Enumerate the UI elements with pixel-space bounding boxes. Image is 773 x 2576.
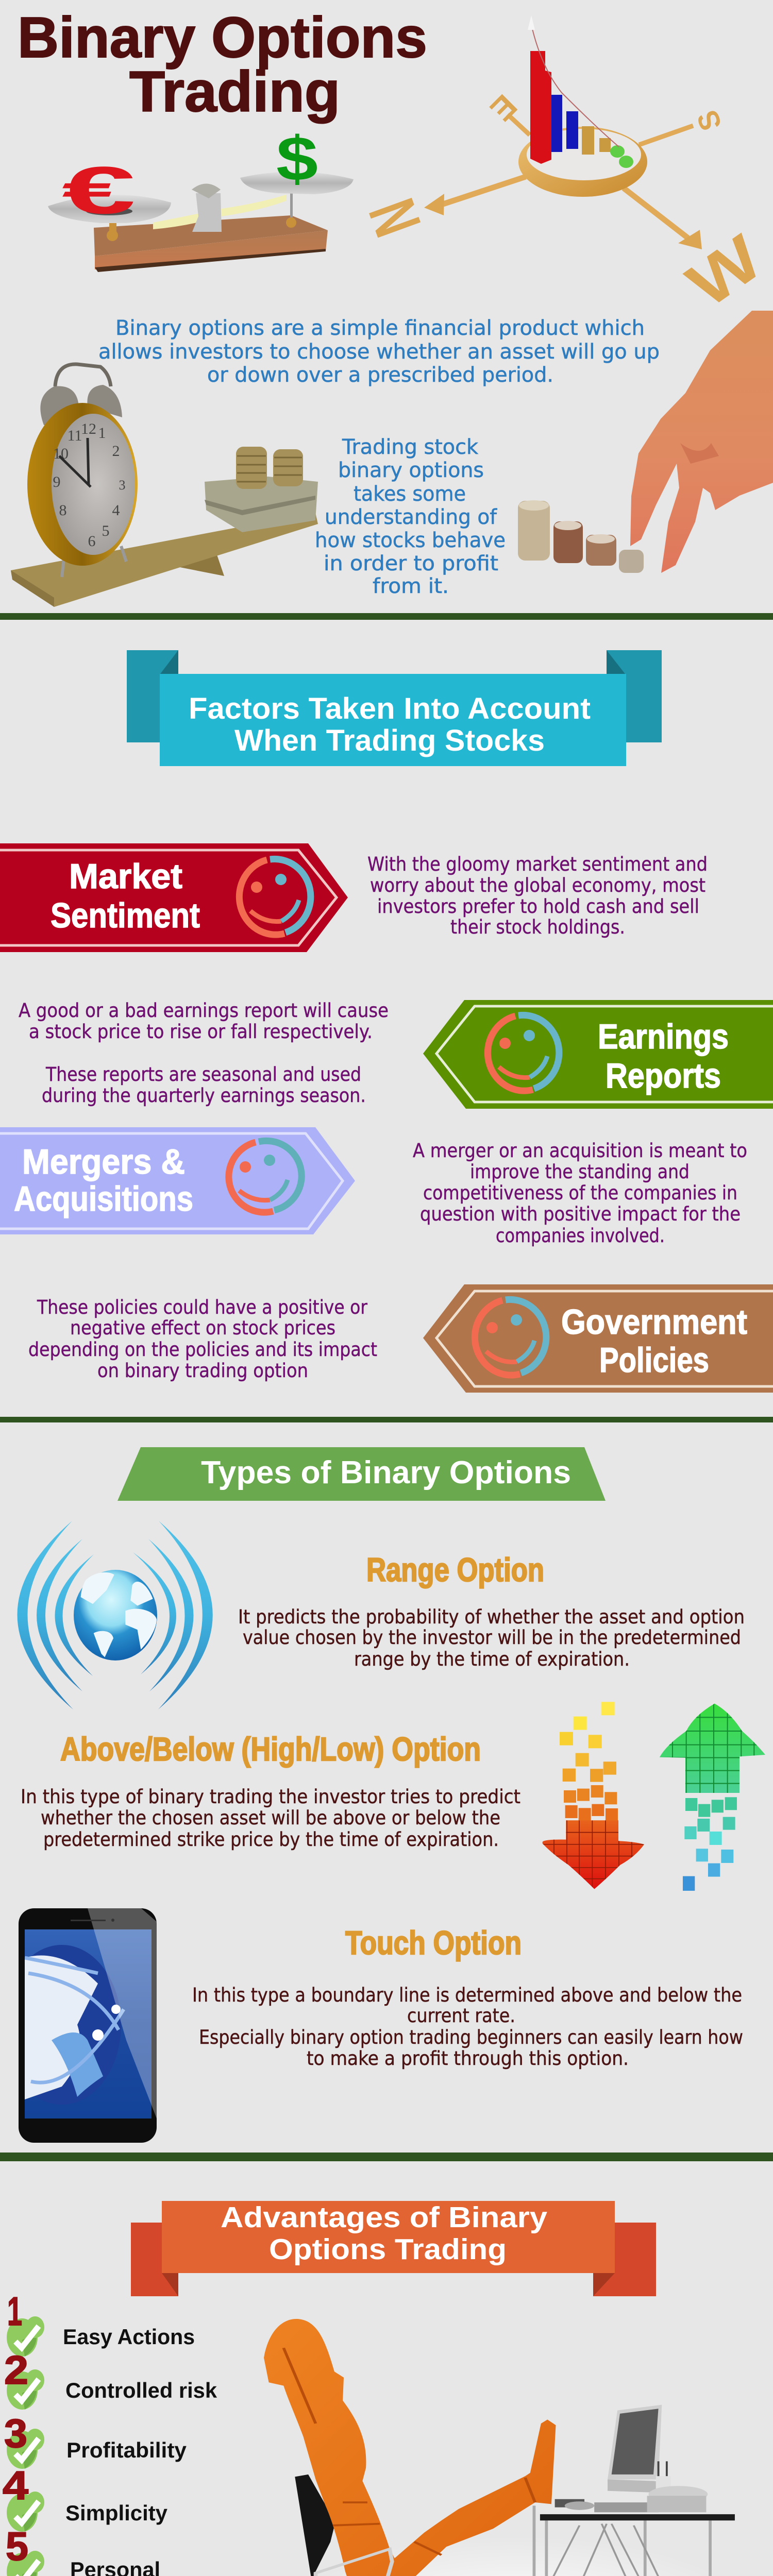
icon: compass with bar chart: W [675,222,773,321]
heading ribbon: advantages: Advantages of Binary [221,2201,547,2234]
text block: market sentiment: their stock holdings. [450,916,625,938]
text block: earnings reports: during the quarterly earnings season. [42,1084,366,1107]
text block: government policies [28,1296,377,1382]
text block: intro [98,316,660,387]
text block: above below option: predetermined strike price by the time of expiration. [43,1828,499,1851]
panel: earnings reports: Earnings [598,1017,729,1056]
icon: smartphone [19,1908,157,2143]
list item 2: Controlled risk [65,2378,217,2402]
text block: government policies: on binary trading option [97,1360,308,1382]
icon: balance scale with euro and dollar [48,124,354,272]
icon: compass with bar chart: S [691,106,728,135]
panel: market sentiment: Market [69,857,182,896]
text block: trading stock: from it. [373,574,449,598]
text block: touch option: current rate. [407,2005,515,2027]
icon: compass with bar chart: N [355,190,434,245]
text block: earnings reports: A good or a bad earnings report will cause [19,999,389,1022]
text block: mergers [413,1140,747,1247]
text block: touch option: Touch Option [345,1924,522,1961]
icon: compass with bar chart [355,15,773,321]
panel: government policies: Government [561,1302,747,1342]
text block: intro: or down over a prescribed period. [207,363,553,387]
title: Trading [129,60,340,124]
text block: range option: range by the time of expiration. [354,1648,630,1670]
panel: earnings reports [423,1000,773,1109]
text block: trading stock: in order to profit [324,552,498,575]
text block: above below option [21,1731,520,1851]
checklist of advantages [3,2289,217,2576]
list item 1 [7,2289,195,2357]
icon: smiley [229,1141,301,1212]
heading ribbon: factors: When Trading Stocks [234,724,545,757]
text block: earnings reports: a stock price to rise or fall respectively. [29,1021,373,1043]
icon: alarm clock on plank with money: 2 [112,443,120,460]
title [18,6,427,124]
text block: trading stock: Trading stock [342,435,479,459]
text block: trading stock: how stocks behave [315,529,506,552]
list item 5: 5 [6,2523,28,2569]
icon: alarm clock on plank with money: 6 [88,533,96,550]
computer monitor [608,2405,708,2512]
mannequin figure [264,2319,556,2576]
list item 5 [6,2523,160,2576]
text block: intro: allows investors to choose whether an asset will go up [98,340,660,364]
text block: above below option: In this type of binary trading the investor tries to predict [21,1786,520,1808]
text block: mergers: question with positive impact for the [420,1203,741,1225]
icon: alarm clock on plank with money: 12 [81,420,96,437]
text block: market sentiment: worry about the global economy, most [370,874,705,896]
icon: alarm clock on plank with money: 8 [59,502,67,519]
text block: trading stock [315,435,506,598]
text block: trading stock: binary options [338,459,484,482]
panel: mergers and acquisitions: Mergers & [22,1142,185,1181]
text block: mergers: companies involved. [496,1225,665,1247]
heading ribbon: factors: Factors Taken Into Account [189,692,591,725]
text block: above below option: Above/Below (High/Low) Option [60,1731,481,1768]
icon: alarm clock on plank with money: 9 [53,473,61,490]
panel: market sentiment [0,843,348,952]
list item 1: Easy Actions [63,2325,195,2349]
text block: government policies: These policies could have a positive or [37,1296,368,1318]
text block: touch option: to make a profit through this option. [307,2047,629,2070]
icon: alarm clock on plank with money: 1 [98,425,106,442]
icon: compass with bar chart: E [483,88,524,128]
icon: smiley [475,1299,546,1375]
text block: mergers: competitiveness of the companies in [423,1182,737,1204]
list item 1: 1 [7,2289,22,2334]
text block: market sentiment: With the gloomy market sentiment and [367,853,708,875]
list item 4: Simplicity [65,2501,168,2525]
chair arm [315,2549,392,2576]
text block: earnings reports: These reports are seasonal and used [45,1063,361,1086]
text block: market sentiment: investors prefer to hold cash and sell [377,895,699,918]
heading ribbon: advantages [131,2201,656,2296]
heading ribbon: factors [127,650,662,766]
list item 2: 2 [4,2347,28,2393]
title: Binary Options [18,6,427,70]
desk [534,2499,735,2576]
icon: alarm clock on plank with money: 10 [53,445,69,462]
text block: mergers: A merger or an acquisition is meant to [413,1140,747,1162]
text block: trading stock: takes some [354,482,466,506]
panel: government policies [423,1284,773,1393]
icon: smiley [239,859,311,935]
panel: government policies: Policies [599,1341,709,1380]
text block: intro: Binary options are a simple financial product which [115,316,645,340]
chair [295,2475,430,2576]
heading: types of binary options [117,1447,606,1501]
text block: market sentiment [367,853,708,938]
text block: government policies: negative effect on stock prices [70,1317,335,1339]
list item 4 [3,2463,168,2532]
list item 3: Profitability [66,2438,187,2462]
text block: range option: Range Option [366,1551,544,1588]
list item 2 [4,2347,217,2410]
panel: earnings reports: Reports [606,1056,721,1095]
icon: down arrow [541,1702,646,1889]
text block: earnings reports [19,999,389,1107]
icon: hand walking on coins [518,311,773,573]
text block: trading stock: understanding of [325,505,497,529]
icon: smiley [488,1015,559,1091]
text block: touch option [192,1924,743,2070]
panel: market sentiment: Sentiment [51,896,200,935]
icon: globe with signal waves [17,1521,213,1709]
heading: types of binary options: Types of Binary Options [201,1455,571,1490]
illustration: mannequin relaxing at desk [264,2319,742,2576]
text block: mergers: improve the standing and [470,1161,690,1183]
icon: balance scale with euro and dollar: € [62,152,136,228]
list item 3 [4,2411,187,2469]
panel: mergers and acquisitions: Acquisitions [14,1179,193,1218]
heading ribbon: advantages: Options Trading [269,2233,507,2266]
icon: down and up cube arrows [541,1702,766,1891]
panel: mergers and acquisitions [0,1127,355,1234]
icon: alarm clock on plank with money: 4 [112,502,120,519]
icon: alarm clock on plank with money: 11 [68,427,82,444]
icon: alarm clock on plank with money: 5 [102,522,109,539]
icon: alarm clock on plank with money [11,364,318,607]
text block: above below option: whether the chosen asset will be above or below the [41,1807,500,1829]
icon: alarm clock on plank with money: 3 [119,478,126,493]
list item 4: 4 [3,2463,28,2508]
list item 3: 3 [4,2411,27,2456]
text block: range option [238,1551,745,1670]
text block: government policies: depending on the policies and its impact [28,1338,377,1361]
icon: balance scale with euro and dollar: $ [276,124,318,194]
icon: up arrow [658,1704,766,1891]
